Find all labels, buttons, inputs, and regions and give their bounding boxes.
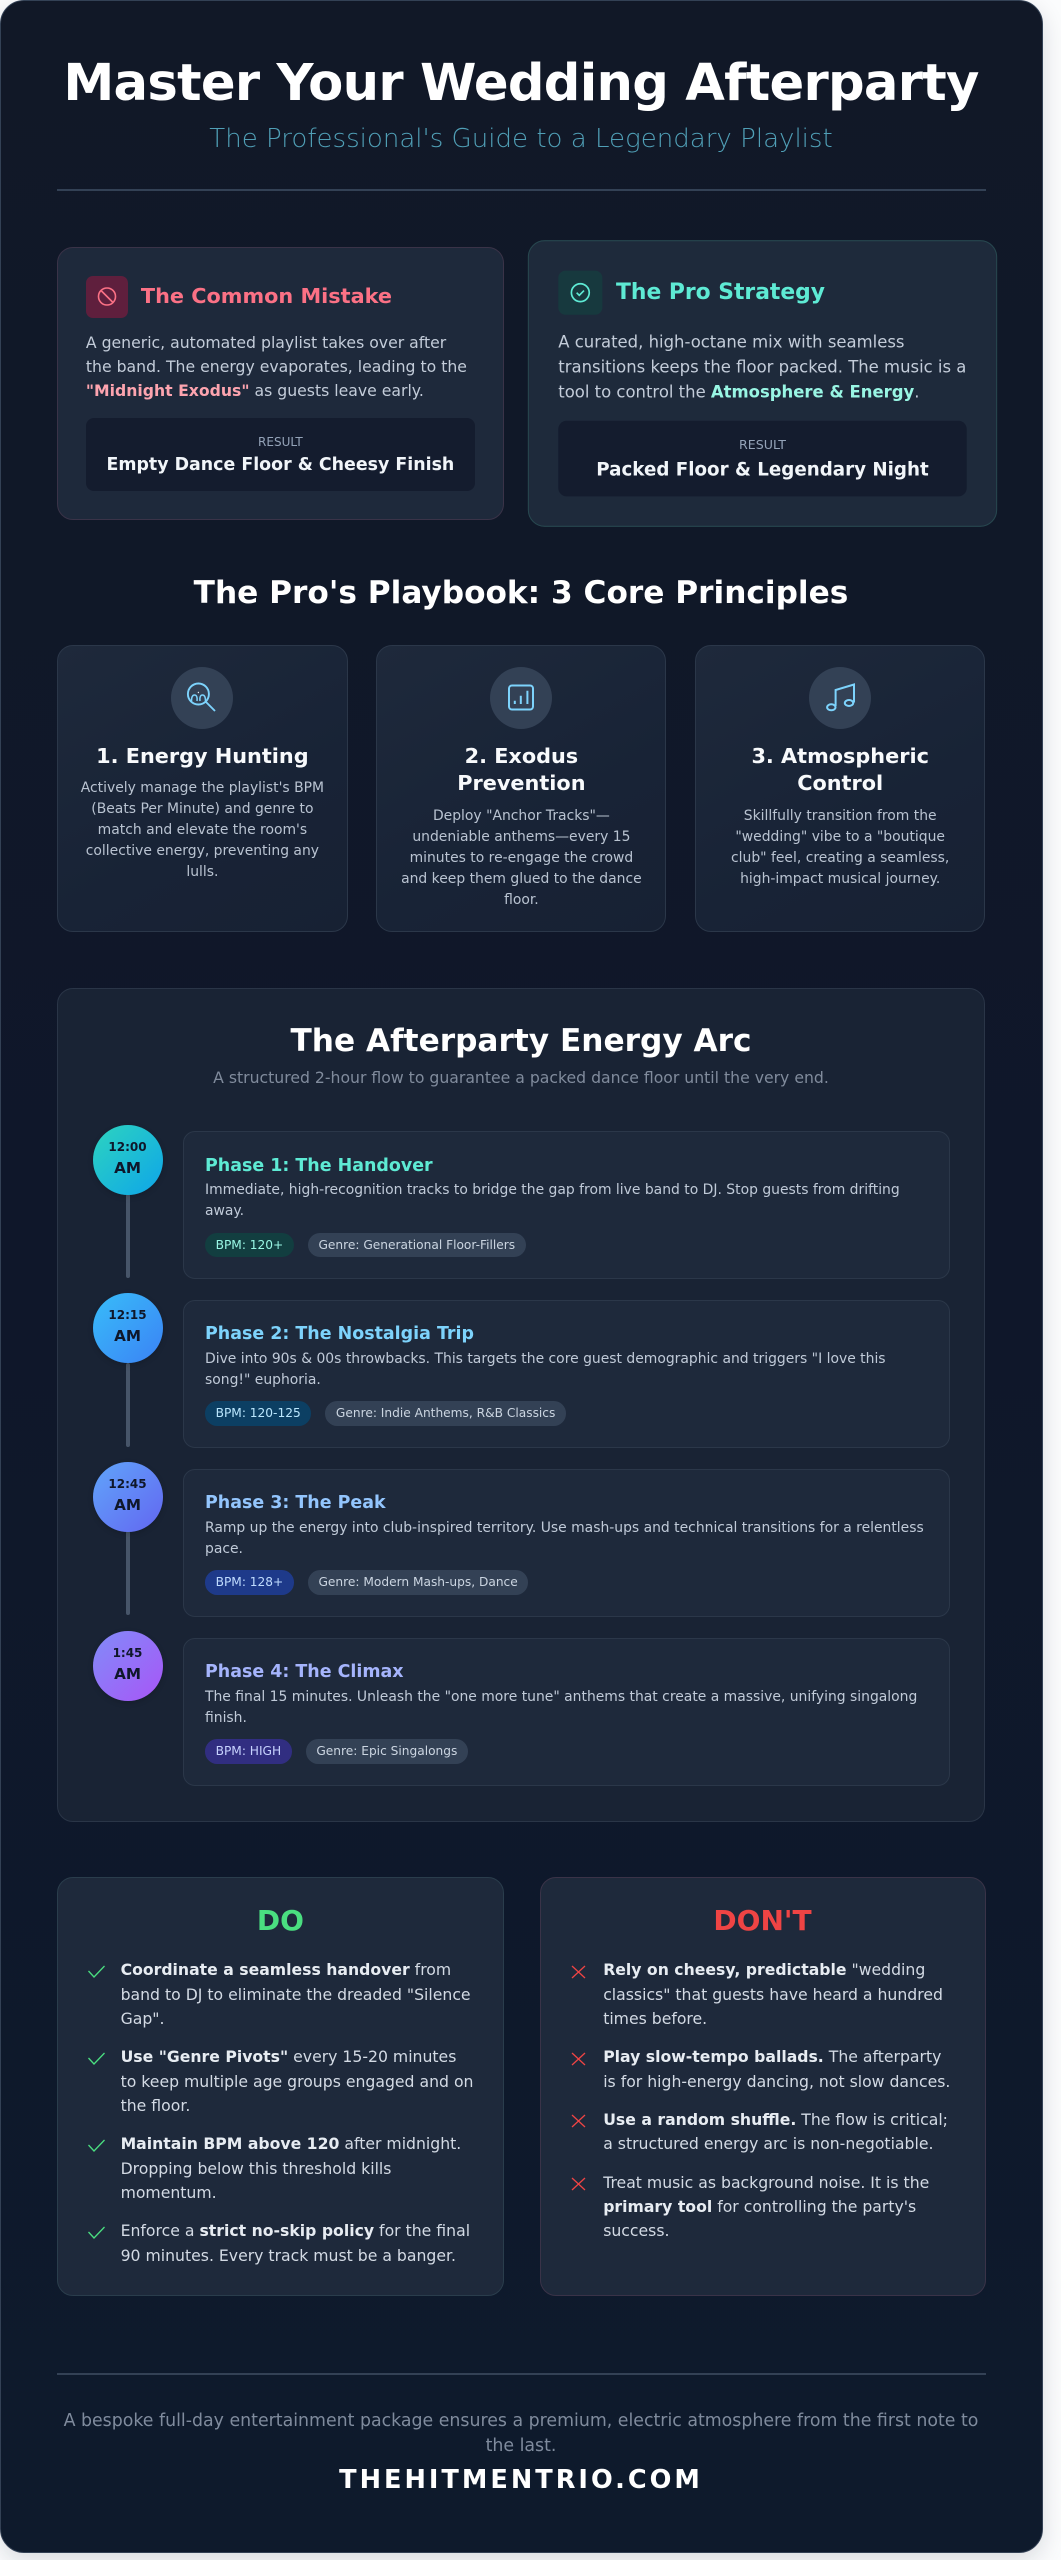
do item 3: momentum. [121, 2183, 217, 2202]
text: atmospheric control [731, 808, 949, 886]
result: packed floor: Packed Floor & Legendary Night [596, 459, 928, 480]
phase 2 card [183, 1300, 950, 1448]
footer text [64, 2411, 978, 2456]
text: mistake description: the band. The energy evaporates, leading to the [86, 357, 467, 376]
don't item 1: classics" that guests have heard a hundred [603, 1985, 943, 2004]
phase 4 tags [205, 1739, 468, 1764]
icon: prohibited [86, 276, 128, 318]
don't item 3 [603, 2110, 948, 2153]
do item 3: Maintain BPM above 120 after midnight. [121, 2134, 461, 2153]
result: empty dance floor [86, 418, 475, 490]
text: energy hunting: (Beats Per Minute) and genre to [91, 801, 314, 817]
icon: chart [490, 666, 552, 728]
phase 4 tags: BPM: HIGH [216, 1744, 281, 1758]
check 3 [88, 2140, 105, 2152]
text: exodus prevention: floor. [504, 892, 539, 908]
phase 3 heading: Phase 3: The Peak [205, 1493, 386, 1513]
phase 4 text: finish. [205, 1710, 247, 1726]
heading: playbook: The Pro's Playbook: 3 Core Principles [194, 574, 848, 610]
heading: energy hunting: 1. Energy Hunting [96, 744, 309, 768]
do item 1 [121, 1960, 471, 2028]
heading: atmospheric control [751, 744, 929, 795]
phase 1 tags: BPM: 120+ [216, 1238, 283, 1252]
time marker 12:15: 12:15 [108, 1308, 147, 1322]
check 2 [88, 2052, 105, 2065]
text: mistake description: "Midnight Exodus" as guests leave early. [86, 381, 424, 400]
time marker 12:45: AM [114, 1496, 141, 1514]
text: mistake description [86, 333, 467, 400]
phase 1 text [205, 1182, 900, 1219]
don't item 2: Play slow-tempo ballads. The afterparty [603, 2047, 941, 2066]
don't item 3: a structured energy arc is non-negotiable. [603, 2134, 933, 2153]
do item 2: the floor. [121, 2096, 190, 2115]
panel: don't [540, 1877, 986, 2296]
panel: principle 1 [57, 644, 348, 932]
phase 2 heading: Phase 2: The Nostalgia Trip [205, 1324, 474, 1344]
phase 2 tags [205, 1401, 566, 1426]
text: exodus prevention: Deploy "Anchor Tracks"— [433, 808, 610, 824]
text: atmospheric control: high-impact musical journey. [740, 870, 940, 886]
do item 4: Enforce a strict no-skip policy for the final [121, 2221, 470, 2240]
do item 2: to keep multiple age groups engaged and on [121, 2072, 473, 2091]
don't item 3: Use a random shuffle. The flow is critical; [603, 2110, 948, 2129]
title: Master Your Wedding Afterparty [63, 52, 979, 112]
phase 3 tags: BPM: 128+ [216, 1575, 283, 1589]
connector 3 [126, 1530, 130, 1614]
text: strategy description: transitions keeps the floor packed. The music is a [558, 356, 966, 376]
heading: don't: DON'T [713, 1904, 812, 1937]
time marker 1:45: 1:45 [113, 1646, 142, 1660]
do item 1: Gap". [121, 2009, 164, 2028]
heading: exodus prevention: Prevention [457, 771, 586, 795]
don't item 4: primary tool for controlling the party's [603, 2197, 916, 2216]
text: energy hunting [80, 780, 324, 880]
panel: the common mistake [57, 246, 504, 520]
check 4 [88, 2226, 105, 2239]
time marker 12:45 [92, 1462, 162, 1532]
do item 4 [121, 2221, 470, 2265]
cross 3 [572, 2114, 586, 2128]
phase 1 heading: Phase 1: The Handover [205, 1156, 433, 1176]
text: energy hunting: match and elevate the room's [98, 822, 307, 838]
phase 3 text: pace. [205, 1541, 243, 1557]
result: packed floor [558, 420, 966, 496]
time marker 12:15 [92, 1293, 162, 1363]
phase 2 tags: Genre: Indie Anthems, R&B Classics [336, 1406, 555, 1420]
phase 2 text: Dive into 90s & 00s throwbacks. This targets the core guest demographic and triggers "I love this [205, 1351, 886, 1367]
phase 2 tags: BPM: 120-125 [216, 1406, 301, 1420]
time marker 12:15: AM [114, 1327, 141, 1345]
phase 1 text: Immediate, high-recognition tracks to bridge the gap from live band to DJ. Stop guests from drifting [205, 1182, 900, 1198]
heading: exodus prevention: 2. Exodus [465, 744, 578, 768]
cross 4 [572, 2178, 586, 2190]
text: atmospheric control: "wedding" vibe to a "boutique [735, 828, 945, 844]
text: exodus prevention [401, 808, 642, 908]
do item 4: 90 minutes. Every track must be a banger. [121, 2246, 456, 2265]
text: atmospheric control: Skillfully transition from the [744, 808, 937, 824]
don't item 4 [603, 2173, 929, 2240]
result: packed floor: RESULT [739, 437, 785, 452]
heading: the pro strategy: The Pro Strategy [616, 279, 825, 304]
text: exodus prevention: and keep them glued to the dance [401, 870, 642, 886]
result: empty dance floor: Empty Dance Floor & Cheesy Finish [106, 455, 454, 475]
don't item 2: is for high-energy dancing, not slow dances. [603, 2072, 950, 2091]
do item 3: Dropping below this threshold kills [121, 2159, 391, 2178]
phase 4 tags: Genre: Epic Singalongs [316, 1744, 457, 1758]
heading: atmospheric control: 3. Atmospheric [751, 744, 929, 768]
icon: music note [809, 666, 871, 728]
text: energy hunting: collective energy, preventing any [86, 843, 319, 859]
panel: principle 3 [695, 644, 985, 932]
heading: atmospheric control: Control [797, 771, 883, 795]
time marker 12:00 [92, 1124, 162, 1194]
footer website: THEHITMENTRIO.COM [339, 2464, 703, 2494]
phase 1 tags: Genre: Generational Floor-Fillers [318, 1238, 515, 1252]
don't item 4: Treat music as background noise. It is the [603, 2173, 929, 2192]
text: energy hunting: Actively manage the playlist's BPM [81, 780, 324, 796]
time marker 12:00: 12:00 [108, 1140, 147, 1154]
cross 2 [572, 2052, 586, 2066]
do item 1: band to DJ to eliminate the dreaded "Silence [121, 1985, 471, 2004]
text: strategy description: tool to control the Atmosphere & Energy. [558, 382, 919, 402]
do item 2: Use "Genre Pivots" every 15-20 minutes [121, 2047, 456, 2066]
footer text: the last. [486, 2436, 556, 2456]
heading: energy arc: The Afterparty Energy Arc [290, 1022, 752, 1058]
do item 1: Coordinate a seamless handover from [121, 1960, 451, 1979]
phase 3 text: Ramp up the energy into club-inspired territory. Use mash-ups and technical transitions for a relentless [205, 1520, 924, 1536]
phase 4 heading: Phase 4: The Climax [205, 1662, 404, 1682]
heading: exodus prevention [457, 744, 586, 795]
don't item 1 [603, 1960, 943, 2028]
panel: principle 2 [376, 644, 666, 932]
phase 3 card [183, 1468, 950, 1616]
text: strategy description [558, 331, 966, 402]
text: exodus prevention: minutes to re-engage the crowd [410, 850, 633, 866]
time marker 12:00: AM [114, 1158, 141, 1176]
do item 2 [121, 2047, 473, 2115]
footer text: A bespoke full-day entertainment package ensures a premium, electric atmosphere from the first note to [64, 2411, 978, 2431]
phase 2 text [205, 1351, 886, 1388]
result: empty dance floor: RESULT [258, 435, 303, 449]
phase 1 tags [205, 1233, 526, 1257]
cross 1 [572, 1966, 586, 1978]
do item 3 [121, 2134, 461, 2202]
phase 1 card [183, 1131, 950, 1279]
don't item 1: times before. [603, 2009, 707, 2028]
text: mistake description: A generic, automated playlist takes over after [86, 333, 446, 352]
heading: the common mistake: The Common Mistake [141, 284, 392, 308]
time marker 1:45: AM [114, 1664, 141, 1682]
phase 2 text: song!" euphoria. [205, 1372, 321, 1388]
panel: energy arc timeline [57, 988, 985, 1822]
text: energy hunting: lulls. [186, 864, 218, 880]
phase 3 tags [205, 1570, 528, 1595]
panel: do [57, 1877, 504, 2296]
connector 1 [126, 1194, 130, 1278]
text: strategy description: A curated, high-octane mix with seamless [558, 331, 904, 351]
subtitle: energy arc: A structured 2-hour flow to guarantee a packed dance floor until the very end. [213, 1068, 829, 1086]
check 1 [88, 1966, 105, 1978]
subtitle: The Professional's Guide to a Legendary Playlist [209, 124, 833, 154]
icon: energy hunting [171, 666, 233, 728]
time marker 12:45: 12:45 [108, 1477, 147, 1491]
don't item 1: Rely on cheesy, predictable "wedding [603, 1960, 925, 1979]
phase 3 tags: Genre: Modern Mash-ups, Dance [318, 1575, 518, 1589]
don't item 2 [603, 2047, 950, 2091]
phase 4 text [204, 1689, 917, 1726]
heading: do: DO [257, 1904, 304, 1937]
panel: the pro strategy [527, 240, 997, 526]
text: exodus prevention: undeniable anthems—every 15 [412, 828, 630, 844]
time marker 1:45 [92, 1630, 162, 1700]
phase 1 text: away. [205, 1203, 244, 1219]
phase 4 card [183, 1638, 950, 1786]
phase 4 text: The final 15 minutes. Unleash the "one more tune" anthems that create a massive, unifying singalong [205, 1689, 917, 1705]
text: atmospheric control: club" feel, creating a seamless, [731, 850, 949, 866]
connector 2 [126, 1362, 130, 1446]
don't item 4: success. [603, 2221, 669, 2240]
phase 3 text [205, 1520, 924, 1557]
icon: check circle [558, 270, 602, 314]
